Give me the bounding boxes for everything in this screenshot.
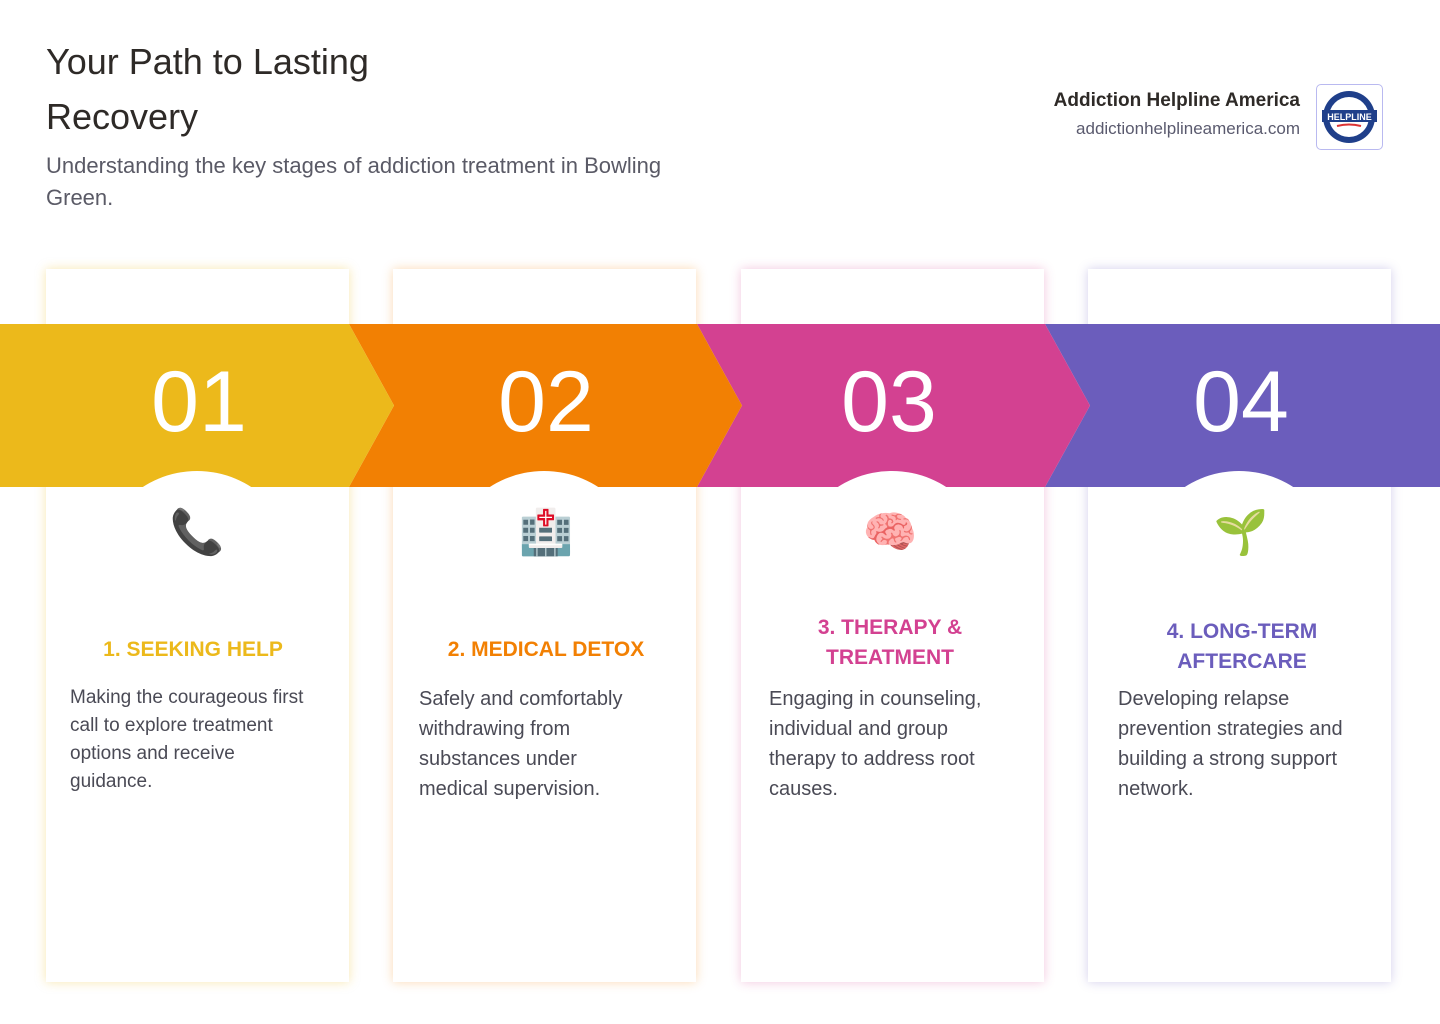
banner chevrons [0, 324, 1440, 487]
card 3 [741, 269, 1044, 982]
heading 3: TREATMENT [826, 646, 954, 669]
brand url: addictionhelplineamerica.com [1076, 119, 1300, 138]
number 01: 01 [151, 354, 247, 450]
text 2: Safely and comfortably withdrawing from substances under medical supervision. [419, 688, 622, 800]
heading 4: 4. LONG-TERM [1167, 620, 1317, 643]
card 2 [393, 269, 696, 982]
heading 3 [818, 616, 962, 669]
heading 2: 2. MEDICAL DETOX [448, 638, 644, 661]
logo: HELPLINE [1327, 112, 1372, 122]
number 04: 04 [1193, 354, 1289, 450]
logo [1316, 84, 1383, 150]
heading 3: 3. THERAPY & [818, 616, 962, 639]
icon: phone: 📞 [170, 508, 224, 557]
icon: seedling: 🌱 [1214, 508, 1268, 557]
heading 1: 1. SEEKING HELP [103, 638, 283, 661]
number 02: 02 [498, 354, 594, 450]
number 03: 03 [841, 354, 937, 450]
subtitle: Understanding the key stages of addiction treatment in Bowling Green. [46, 153, 661, 210]
text 1: Making the courageous first call to explore treatment options and receive guidance. [70, 687, 303, 792]
card 4 [1088, 269, 1391, 982]
brand block [1054, 84, 1383, 150]
text 3: Engaging in counseling, individual and group therapy to address root causes. [769, 688, 981, 800]
icon: hospital: 🏥 [519, 508, 573, 557]
icon: brain: 🧠 [863, 508, 917, 557]
circles [97, 471, 297, 671]
text 4: Developing relapse prevention strategies and building a strong support network. [1118, 688, 1343, 800]
card 1 [46, 269, 349, 982]
brand name: Addiction Helpline America [1054, 90, 1300, 111]
heading 4: AFTERCARE [1177, 650, 1307, 673]
heading 4 [1167, 620, 1317, 673]
title: Your Path to Lasting Recovery [46, 41, 369, 137]
